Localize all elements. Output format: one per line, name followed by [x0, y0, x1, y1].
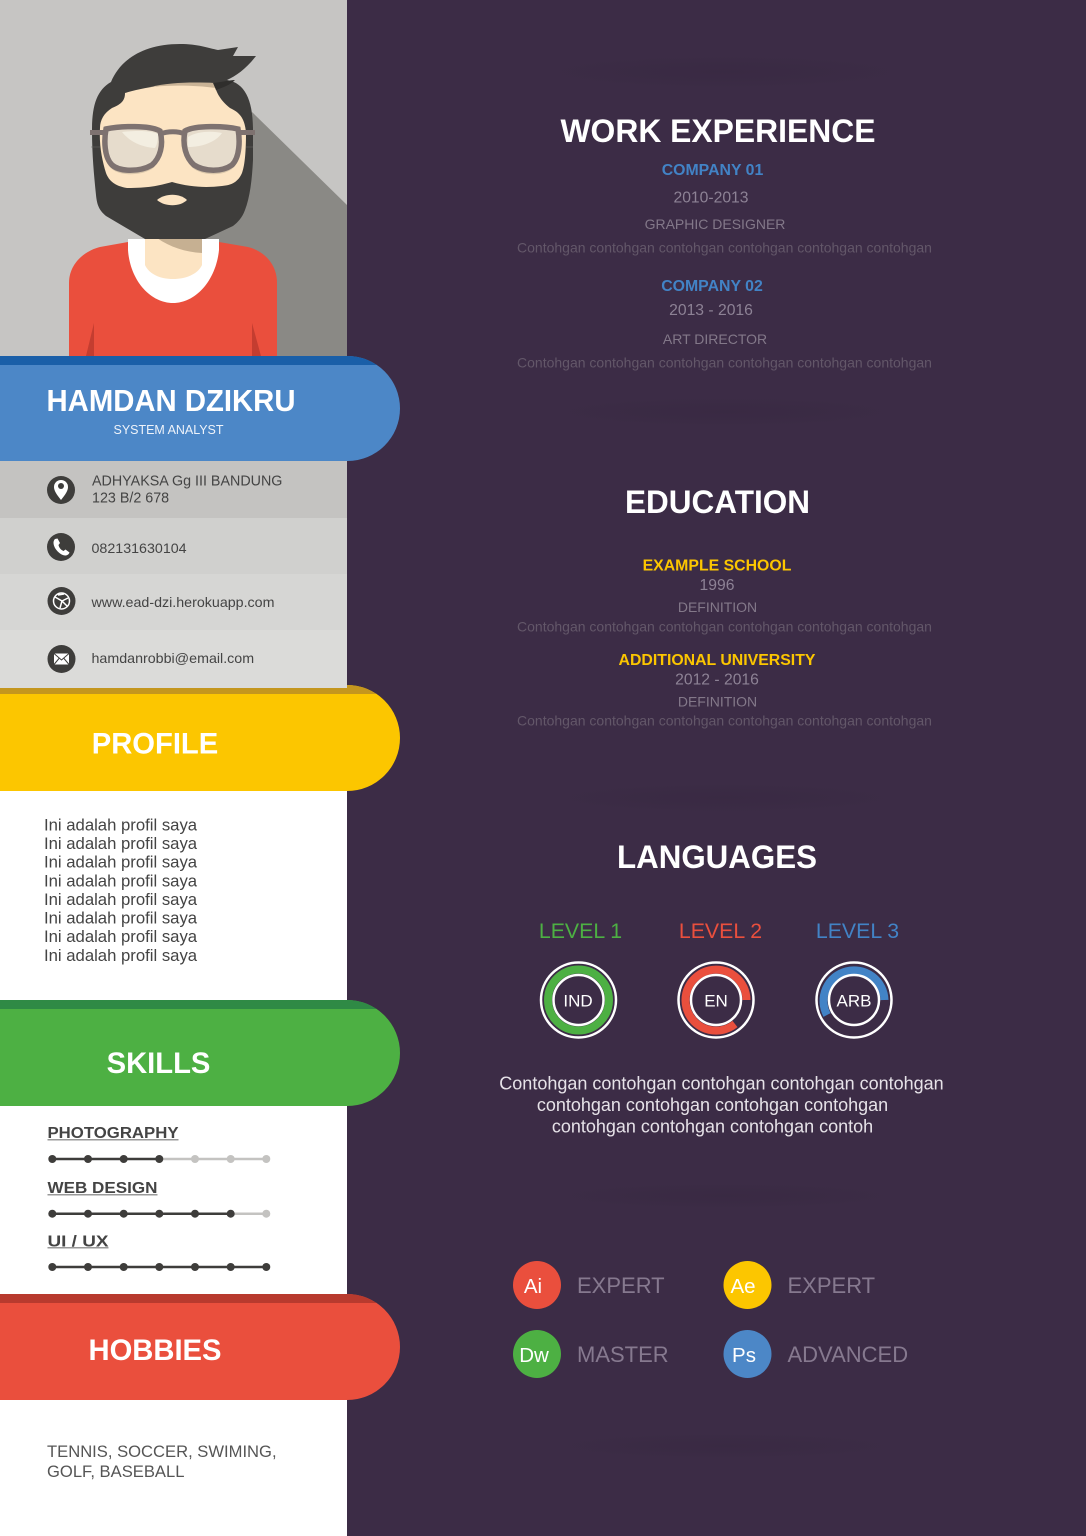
company 01 — [517, 162, 932, 256]
software: photoshop: ADVANCED — [788, 1342, 908, 1367]
company 02: Contohgan contohgan contohgan contohgan contohgan contohgan — [517, 354, 932, 370]
software: illustrator: Ai — [524, 1275, 542, 1298]
heading: WORK EXPERIENCE — [560, 113, 876, 149]
right background panel — [347, 0, 1086, 1536]
school — [517, 558, 932, 634]
skill: web design: WEB DESIGN — [48, 1180, 158, 1197]
software: dreamweaver: MASTER — [577, 1342, 669, 1367]
section: languages — [499, 839, 944, 1136]
software: illustrator — [513, 1261, 665, 1309]
skill: ui ux — [48, 1234, 270, 1271]
university: DEFINITION — [678, 694, 757, 710]
contact: website — [0, 574, 347, 630]
profile text: Ini adalah profil saya — [44, 853, 198, 872]
company 02: 2013 - 2016 — [669, 302, 753, 319]
level labels — [539, 919, 899, 943]
software: dreamweaver: Dw — [519, 1344, 549, 1367]
heading: LANGUAGES — [617, 839, 817, 875]
left column background — [0, 0, 347, 1536]
contact: address: 123 B/2 678 — [92, 490, 169, 506]
profile text: Ini adalah profil saya — [44, 816, 198, 834]
profile text: Ini adalah profil saya — [44, 946, 198, 965]
company 02 — [517, 278, 932, 370]
face — [100, 83, 246, 188]
heading: PROFILE — [92, 728, 218, 760]
level labels: LEVEL 2 — [679, 919, 762, 943]
profile text — [44, 816, 202, 965]
language description: Contohgan contohgan contohgan contohgan contohgan — [499, 1074, 944, 1094]
software: dreamweaver — [513, 1330, 669, 1378]
section: education — [517, 484, 932, 728]
profile text: Ini adalah profil saya — [44, 890, 198, 909]
hobbies banner — [0, 1294, 400, 1400]
software: illustrator: EXPERT — [577, 1273, 665, 1298]
hair and beard — [92, 44, 256, 239]
company 01: GRAPHIC DESIGNER — [645, 216, 785, 232]
school: Contohgan contohgan contohgan contohgan contohgan contohgan — [517, 618, 932, 634]
language description — [499, 1074, 944, 1136]
contact: email: hamdanrobbi@email.com — [92, 651, 254, 667]
contact: phone — [0, 518, 347, 574]
profile banner — [0, 685, 400, 791]
school: DEFINITION — [678, 599, 757, 615]
language description: contohgan contohgan contohgan contoh — [552, 1116, 873, 1136]
school: EXAMPLE SCHOOL — [643, 558, 792, 574]
language description: contohgan contohgan contohgan contohgan — [537, 1095, 888, 1115]
profile text: Ini adalah profil saya — [44, 927, 198, 946]
ring: arabic: ARB — [837, 991, 871, 1010]
ring: english — [678, 962, 754, 1038]
company 01: COMPANY 01 — [662, 162, 763, 179]
portrait illustration — [69, 44, 347, 358]
software: after effects — [724, 1261, 875, 1309]
name: HAMDAN DZIKRU — [46, 384, 296, 418]
job title: SYSTEM ANALYST — [114, 423, 224, 437]
neck — [145, 236, 202, 279]
ring: english: EN — [704, 991, 728, 1010]
contact: email — [0, 630, 347, 688]
heading: EDUCATION — [625, 484, 810, 520]
profile text: Ini adalah profil saya — [44, 908, 198, 928]
contact: phone: 082131630104 — [92, 541, 187, 557]
mouth — [157, 195, 187, 205]
collar — [128, 239, 219, 303]
skill: web design — [48, 1180, 270, 1218]
ring: indonesian — [541, 962, 616, 1038]
skill: ui ux: UI / UX — [48, 1234, 109, 1250]
ring: arabic — [816, 962, 892, 1038]
contact: address — [0, 461, 347, 518]
glasses — [90, 127, 255, 174]
software: photoshop — [724, 1330, 908, 1378]
company 02: ART DIRECTOR — [663, 331, 767, 347]
ring: indonesian: IND — [563, 991, 593, 1010]
school: 1996 — [700, 577, 735, 594]
software: after effects: EXPERT — [788, 1273, 875, 1298]
name banner — [0, 356, 400, 461]
software: photoshop: Ps — [732, 1344, 756, 1367]
university: Contohgan contohgan contohgan contohgan contohgan contohgan — [517, 712, 932, 728]
level labels: LEVEL 1 — [539, 919, 622, 943]
profile text: Ini adalah profil saya — [44, 871, 198, 890]
contact: address: ADHYAKSA Gg III BANDUNG — [92, 474, 282, 490]
heading: SKILLS — [107, 1048, 210, 1080]
level labels: LEVEL 3 — [816, 919, 899, 943]
hobbies text: TENNIS, SOCCER, SWIMING, — [47, 1442, 277, 1461]
university: 2012 - 2016 — [675, 672, 759, 688]
company 02: COMPANY 02 — [661, 278, 763, 295]
university — [517, 652, 932, 728]
contact: website: www.ead-dzi.herokuapp.com — [90, 595, 274, 611]
skills banner — [0, 1000, 400, 1106]
sweater — [69, 242, 277, 356]
company 01: 2010-2013 — [673, 190, 749, 206]
university: ADDITIONAL UNIVERSITY — [619, 652, 816, 669]
company 01: Contohgan contohgan contohgan contohgan contohgan contohgan — [517, 240, 932, 256]
heading: HOBBIES — [89, 1335, 221, 1367]
skill: photography: PHOTOGRAPHY — [48, 1125, 179, 1142]
section: work experience — [517, 113, 932, 370]
software: after effects: Ae — [730, 1275, 756, 1298]
hobbies text: GOLF, BASEBALL — [47, 1462, 184, 1481]
profile text: Ini adalah profil saya — [44, 834, 198, 853]
skill: photography — [48, 1125, 270, 1163]
